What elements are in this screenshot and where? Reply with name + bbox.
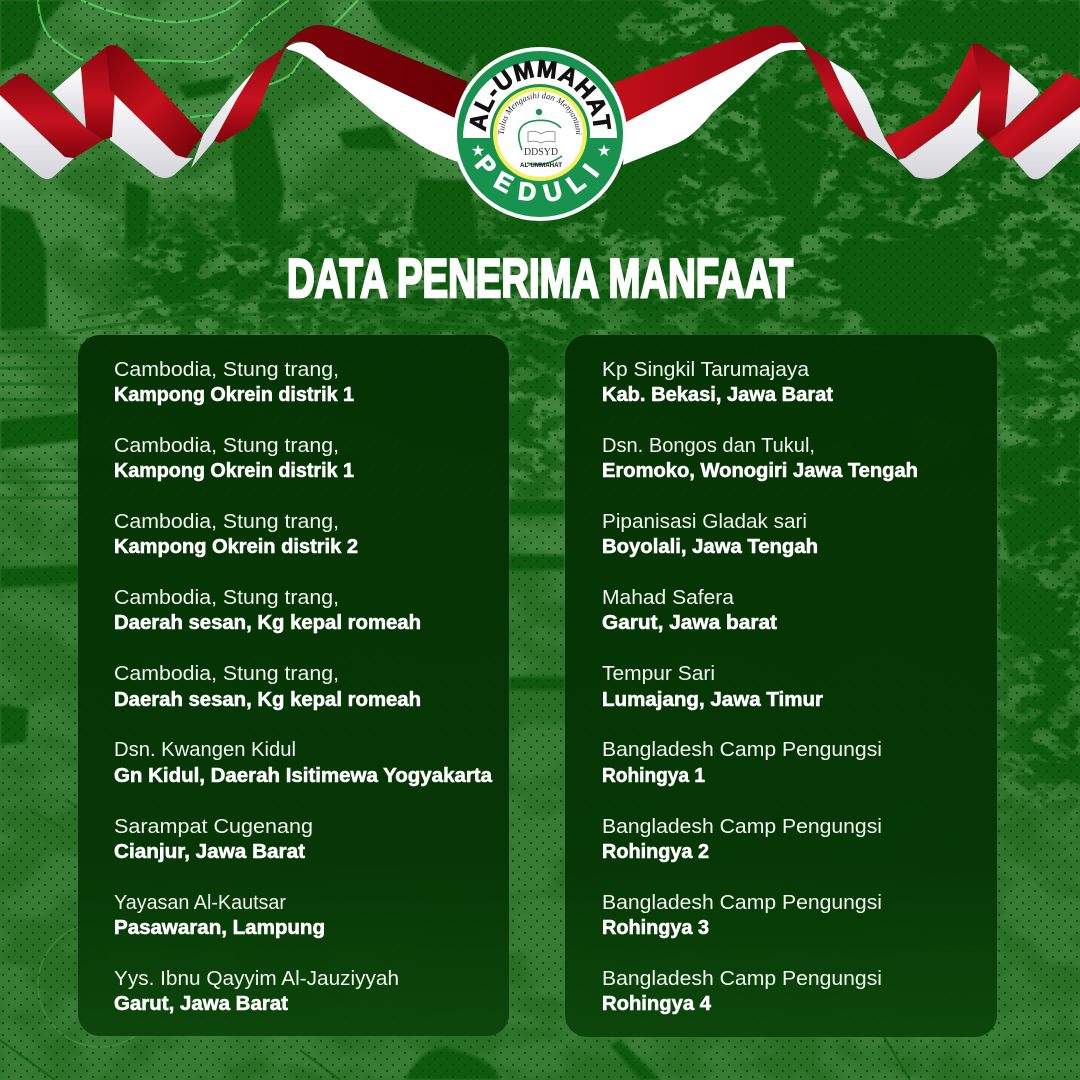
entry: Bangladesh Camp Pengungsi (602, 968, 882, 990)
entry (114, 663, 421, 711)
entry: Garut, Jawa Barat (114, 993, 288, 1015)
ribbon: right red and white flag (614, 25, 1080, 179)
entry: Lumajang, Jawa Timur (602, 689, 823, 711)
logo: Al-Ummahat Peduli badge (454, 47, 626, 221)
entry: Rohingya 2 (602, 841, 709, 863)
entry: Cambodia, Stung trang, (114, 359, 339, 381)
entry: Eromoko, Wonogiri Jawa Tengah (602, 460, 918, 482)
entry (114, 587, 421, 634)
entry (114, 359, 354, 406)
entry (114, 968, 399, 1015)
logo text: AL-UMMAHAT: AL-UMMAHAT (470, 60, 612, 132)
panel: left beneficiary list (78, 335, 509, 1036)
entry: Cambodia, Stung trang, (114, 587, 339, 609)
title: DATA PENERIMA MANFAAT (287, 247, 793, 309)
entry: Daerah sesan, Kg kepal romeah (114, 612, 421, 634)
entry: Sarampat Cugenang (114, 816, 313, 838)
icon: right star: ★ (597, 141, 611, 160)
entry: Cambodia, Stung trang, (114, 663, 339, 685)
entry: Mahad Safera (602, 587, 735, 609)
entry (602, 511, 818, 558)
logo tagline: Tulus Mengasihi dan Menyantuni (498, 92, 582, 134)
entry: Rohingya 1 (602, 765, 705, 787)
entry: Yys. Ibnu Qayyim Al-Jauziyyah (114, 968, 399, 990)
entry: Kampong Okrein distrik 1 (114, 384, 354, 406)
entry: Pipanisasi Gladak sari (602, 511, 807, 533)
entry: Cianjur, Jawa Barat (114, 841, 305, 863)
entry: Boyolali, Jawa Tengah (602, 536, 818, 558)
entry (602, 663, 823, 711)
entry: Bangladesh Camp Pengungsi (602, 816, 882, 838)
logo text: DDSYD: DDSYD (524, 146, 558, 158)
entry: Gn Kidul, Daerah Isitimewa Yogyakarta (114, 765, 493, 787)
entry: Bangladesh Camp Pengungsi (602, 892, 882, 914)
entry (114, 892, 325, 939)
entry: Dsn. Bongos dan Tukul, (602, 435, 815, 457)
panel: right beneficiary list (565, 335, 997, 1037)
entry: Garut, Jawa barat (602, 612, 777, 634)
entry: Kampong Okrein distrik 1 (114, 460, 354, 482)
ribbon: left red and white flag (0, 25, 468, 179)
entry (602, 968, 882, 1015)
entry (114, 511, 358, 558)
entry (114, 739, 493, 787)
logo text: PEDULI: PEDULI (474, 154, 600, 202)
entry: Yayasan Al-Kautsar (114, 892, 286, 914)
entry: Dsn. Kwangen Kidul (114, 739, 296, 761)
entry: Pasawaran, Lampung (114, 917, 325, 939)
entry (602, 587, 777, 634)
entry: Cambodia, Stung trang, (114, 435, 339, 457)
entry: Rohingya 3 (602, 917, 709, 939)
entry: Kab. Bekasi, Jawa Barat (602, 384, 833, 406)
entry (602, 359, 833, 406)
entry (602, 892, 882, 939)
entry: Kampong Okrein distrik 2 (114, 536, 358, 558)
entry (114, 816, 313, 863)
entry (114, 435, 354, 482)
entry: Bangladesh Camp Pengungsi (602, 739, 882, 761)
entry (602, 435, 918, 482)
logo text: small AL-UMMAHAT: AL-UMMAHAT (520, 162, 562, 169)
entry: Rohingya 4 (602, 993, 712, 1015)
entry: Kp Singkil Tarumajaya (602, 359, 810, 381)
entry (602, 816, 882, 863)
entry: Cambodia, Stung trang, (114, 511, 339, 533)
entry: Tempur Sari (602, 663, 715, 685)
icon: crescent, book and swoosh (519, 109, 562, 164)
entry (602, 739, 882, 787)
entry: Daerah sesan, Kg kepal romeah (114, 689, 421, 711)
icon: left star: ★ (471, 141, 485, 160)
